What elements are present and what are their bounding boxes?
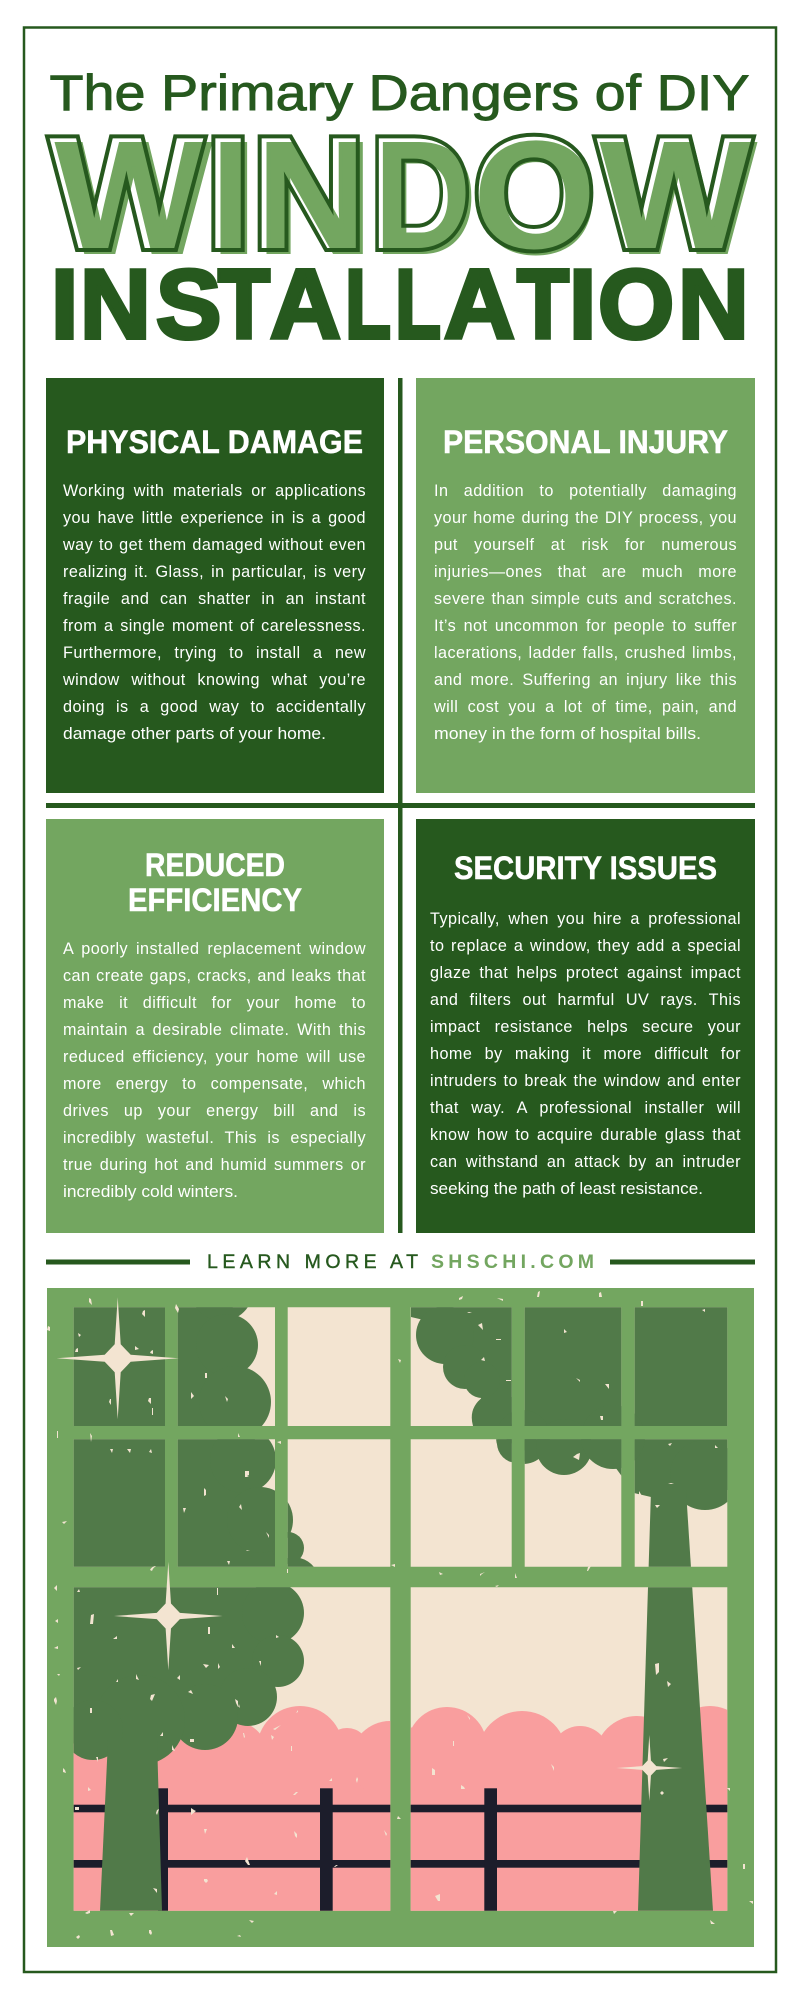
- body text: physical damage: [63, 478, 366, 743]
- title word: INSTALLATION: A: [444, 249, 515, 359]
- title word: INSTALLATION: T: [218, 249, 270, 359]
- title word: WINDOW green fill: O: [475, 111, 597, 286]
- body text: reduced efficiency: incredibly wasteful. This is especially: [63, 1129, 366, 1147]
- body text: physical damage: Furthermore, trying to install a new: [63, 644, 366, 662]
- heading: reduced efficiency: [128, 847, 302, 918]
- title word: INSTALLATION: L: [395, 249, 441, 359]
- left tree: [74, 1307, 314, 1911]
- vertical divider: [398, 378, 402, 1233]
- title line: The Primary Dangers of DIY: The Primary Dangers of DIY: [50, 65, 750, 121]
- title word: WINDOW green fill: N: [258, 111, 371, 286]
- title word: INSTALLATION: N: [678, 249, 749, 359]
- body text: reduced efficiency: more energy to compensate, which: [63, 1075, 366, 1093]
- body text: personal injury: will cost you a lot of time, pain, and: [434, 698, 737, 716]
- body text: security issues: to replace a window, they add a special: [430, 937, 741, 955]
- body text: personal injury: put yourself at risk for numerous: [434, 536, 737, 554]
- heading: personal injury: PERSONAL INJURY: [443, 424, 728, 460]
- body text: physical damage: realizing it. Glass, in particular, is very: [63, 563, 366, 581]
- body text: physical damage: from a single moment of carelessness.: [63, 617, 366, 635]
- window frame: [47, 1288, 754, 1947]
- title word: WINDOW green fill: D: [375, 111, 475, 286]
- body text: personal injury: severe than simple cuts and scratches.: [434, 590, 737, 608]
- fence: [60, 1788, 740, 1913]
- body text: personal injury: In addition to potentially damaging: [434, 482, 737, 500]
- body text: security issues: impact resistance helps secure your: [430, 1018, 741, 1036]
- heading: physical damage: PHYSICAL DAMAGE: [66, 424, 363, 460]
- paint speckles: [47, 1291, 753, 1939]
- body text: personal injury: and more. Suffering an injury like this: [434, 671, 737, 689]
- body text: physical damage: Working with materials or applications: [63, 482, 366, 500]
- body text: reduced efficiency: A poorly installed replacement window: [63, 940, 366, 958]
- body text: personal injury: money in the form of hospital bills.: [434, 725, 701, 743]
- title word: INSTALLATION: I: [51, 249, 78, 359]
- footer call to action: LEARN MORE AT: [207, 1251, 418, 1273]
- heading: reduced efficiency: EFFICIENCY: [128, 882, 302, 918]
- panel: reduced efficiency: [46, 819, 384, 1233]
- title word: INSTALLATION: L: [345, 249, 391, 359]
- body text: personal injury: lacerations, ladder falls, crushed limbs,: [434, 644, 737, 662]
- body text: reduced efficiency: can create gaps, cracks, and leaks that: [63, 967, 366, 985]
- footer call to action: SHSCHI.COM: [431, 1251, 594, 1273]
- body text: personal injury: [434, 478, 737, 743]
- footer call to action: [46, 1251, 755, 1273]
- title word: INSTALLATION: A: [270, 249, 341, 359]
- title word: INSTALLATION: I: [569, 249, 596, 359]
- body text: personal injury: It’s not uncommon for people to suffer: [434, 617, 737, 635]
- horizontal divider: [46, 803, 755, 808]
- heading: reduced efficiency: REDUCED: [145, 847, 285, 883]
- panel: security issues: [416, 819, 755, 1233]
- body text: security issues: can withstand an attack by an intruder: [430, 1153, 741, 1171]
- body text: reduced efficiency: make it difficult for your home to: [63, 994, 366, 1012]
- body text: physical damage: you have little experience in is a good: [63, 509, 366, 527]
- title word: INSTALLATION: S: [156, 249, 221, 359]
- sparkles: [57, 1297, 682, 1801]
- body text: security issues: seeking the path of least resistance.: [430, 1180, 703, 1198]
- body text: physical damage: fragile and can shatter in an instant: [63, 590, 366, 608]
- body text: security issues: home by making it more difficult for: [430, 1045, 741, 1063]
- body text: personal injury: injuries—ones that are much more: [434, 563, 737, 581]
- body text: reduced efficiency: incredibly cold winters.: [63, 1183, 238, 1201]
- body text: personal injury: your home during the DIY process, you: [434, 509, 737, 527]
- body text: security issues: that way. A professional installer will: [430, 1099, 741, 1117]
- heading: security issues: SECURITY ISSUES: [454, 850, 717, 886]
- body text: physical damage: window without knowing what you’re: [63, 671, 366, 689]
- body text: physical damage: doing is a good way to accidentally: [63, 698, 366, 716]
- panel: personal injury: [416, 378, 755, 793]
- panel: physical damage: [46, 378, 384, 793]
- body text: reduced efficiency: drives up your energy bill and is: [63, 1102, 366, 1120]
- illustration: window with trees and fence: [47, 1259, 754, 1947]
- body text: reduced efficiency: maintain a desirable climate. With this: [63, 1021, 366, 1039]
- title word: WINDOW green fill: W: [57, 111, 211, 286]
- right tree: [411, 1290, 740, 1911]
- title word: INSTALLATION: T: [517, 249, 569, 359]
- body text: reduced efficiency: reduced efficiency, your home will use: [63, 1048, 366, 1066]
- pink hedges: [60, 1706, 750, 1917]
- body text: security issues: glaze that helps protect against impact: [430, 964, 741, 982]
- title: [44, 73, 758, 341]
- body text: security issues: [430, 906, 741, 1198]
- body text: security issues: Typically, when you hire a professional: [430, 910, 741, 928]
- body text: reduced efficiency: [63, 936, 366, 1201]
- outdoor scene seen through panes: [74, 1307, 728, 1911]
- title word: INSTALLATION: N: [80, 249, 151, 359]
- sky: [60, 1300, 740, 1920]
- body text: security issues: intruders to break the window and enter: [430, 1072, 741, 1090]
- title word: INSTALLATION: O: [598, 249, 674, 359]
- body text: reduced efficiency: true during hot and humid summers or: [63, 1156, 366, 1174]
- body text: security issues: know how to acquire durable glass that: [430, 1126, 741, 1144]
- body text: security issues: and filters out harmful UV rays. This: [430, 991, 741, 1009]
- title word: WINDOW green fill: W: [602, 111, 756, 286]
- title word: WINDOW outline: [44, 132, 757, 254]
- title word: WINDOW green fill: I: [212, 111, 256, 286]
- body text: physical damage: damage other parts of your home.: [63, 725, 326, 743]
- body text: physical damage: way to get them damaged without even: [63, 536, 366, 554]
